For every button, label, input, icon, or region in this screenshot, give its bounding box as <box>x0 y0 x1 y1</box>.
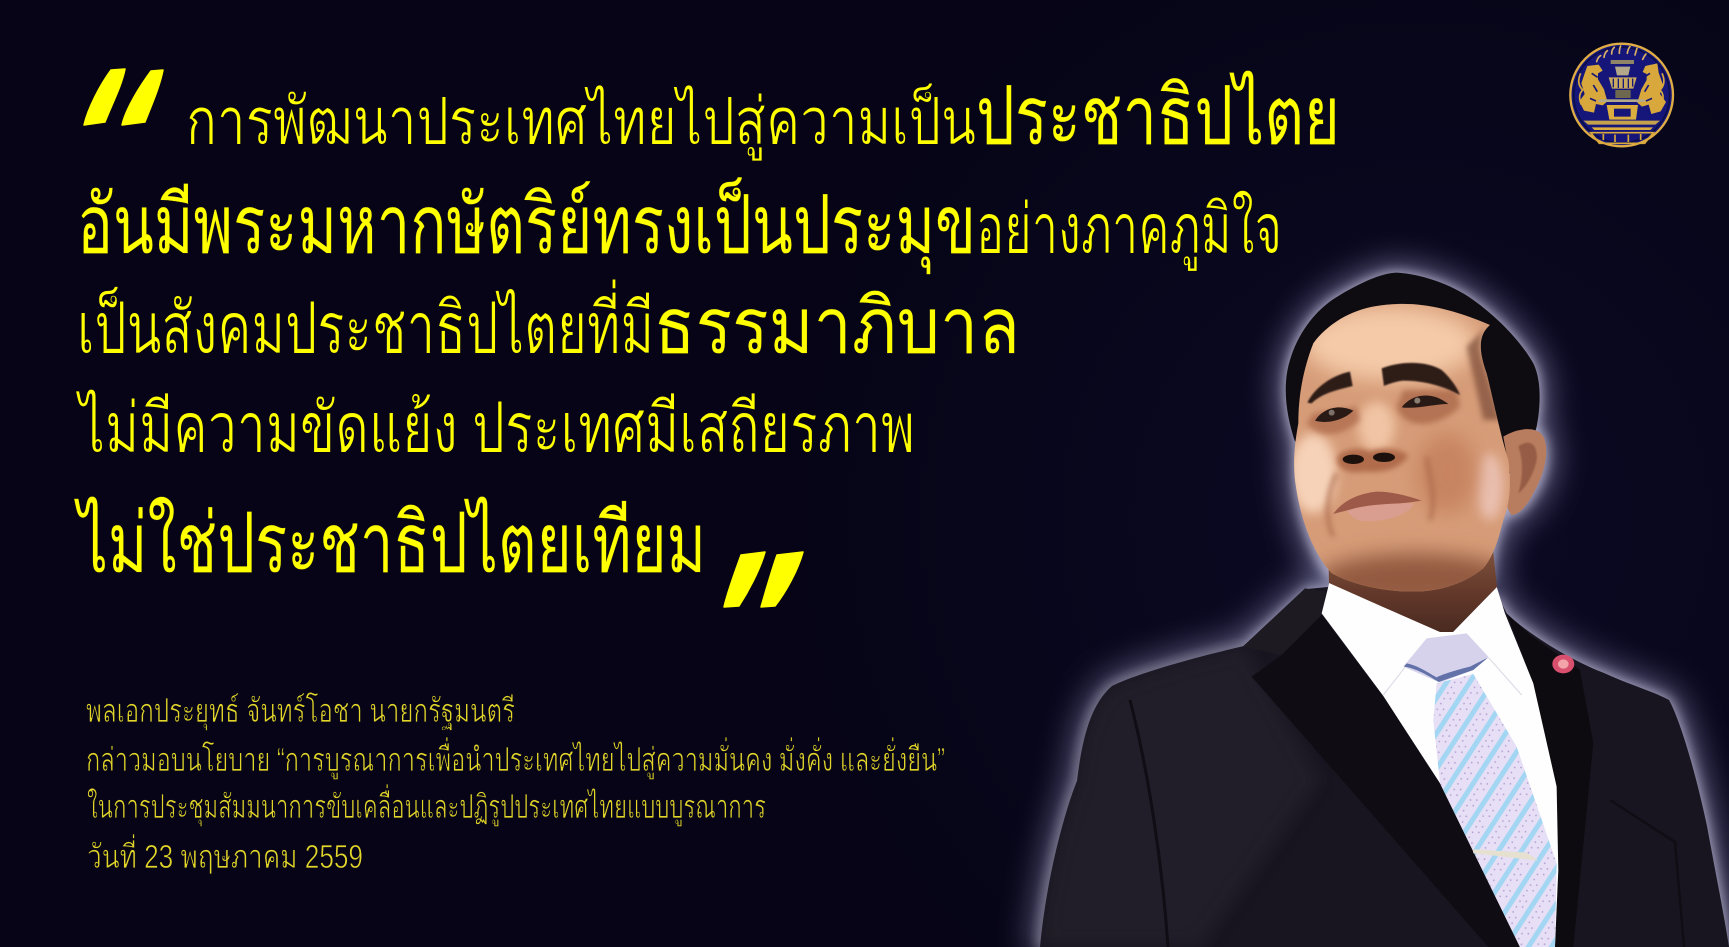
forehead light <box>1303 307 1477 380</box>
mouth <box>1333 492 1422 521</box>
eyes <box>1315 395 1448 422</box>
line 2: อันมีพระมหากษัตริย์ทรงเป็นประมุข <box>77 176 976 275</box>
shirt <box>1322 583 1558 947</box>
date: วันที่ 23 พฤษภาคม 2559 <box>87 834 363 875</box>
lions <box>1579 63 1666 114</box>
left lapel lower <box>1252 615 1520 947</box>
urn <box>1609 60 1637 98</box>
line 4: ไม่มีความขัดแย้ง ประเทศมีเสถียรภาพ <box>75 389 915 467</box>
brows <box>1307 363 1460 403</box>
nasolabial fold <box>1328 457 1433 537</box>
tie clip <box>1473 849 1538 861</box>
right lapel <box>1507 613 1593 947</box>
speech title: กล่าวมอบนโยบาย “การบูรณาการเพื่อนำประเทศไทยไปสู่ความมั่นคง มั่งคั่ง และยั่งยืน” <box>86 737 945 780</box>
knot shadow <box>1404 657 1488 682</box>
head <box>1286 273 1546 632</box>
portrait of speaker <box>1040 273 1729 947</box>
lapel pin <box>1552 655 1574 673</box>
right cheek light <box>1477 453 1503 520</box>
flames <box>1597 46 1646 62</box>
collar tips <box>1383 657 1522 695</box>
line 5: ไม่ใช่ประชาธิปไตยเทียม <box>74 496 706 590</box>
cheek mid tone <box>1417 433 1477 513</box>
main quote text <box>74 71 1340 590</box>
attribution text <box>86 692 945 875</box>
emblem: government seal <box>1570 44 1673 146</box>
line 3: เป็นสังคมประชาธิปไตยที่มี <box>77 279 654 369</box>
neck <box>1328 537 1497 632</box>
left lapel upper <box>1243 588 1325 655</box>
speaker: พลเอกประยุทธ์ จันทร์โอชา นายกรัฐมนตรี <box>86 692 515 731</box>
line 2: อย่างภาคภูมิใจ <box>976 189 1282 272</box>
suit jacket <box>1040 587 1729 947</box>
line 3: ธรรมาภิบาล <box>654 282 1020 370</box>
face <box>1294 304 1510 592</box>
tie blade <box>1433 674 1557 947</box>
tie knot <box>1403 633 1488 683</box>
left cheek light <box>1290 433 1337 513</box>
jaw shadow <box>1322 542 1493 592</box>
opening quotation mark <box>84 69 163 125</box>
event: ในการประชุมสัมมนาการขับเคลื่อนและปฏิรูปประเทศไทยแบบบูรณาการ <box>87 784 766 827</box>
nose bridge light <box>1358 402 1395 452</box>
line 1: ประชาธิปไตย <box>976 71 1340 162</box>
under eye right <box>1397 390 1460 424</box>
under eye left <box>1307 407 1360 434</box>
plinth <box>1583 99 1660 143</box>
collar, shirt, tie <box>1243 583 1593 947</box>
nose <box>1337 449 1408 472</box>
inner ear <box>1518 443 1537 493</box>
line 1: การพัฒนาประเทศไทยไปสู่ความเป็น <box>186 82 976 162</box>
jacket shading <box>1040 646 1684 947</box>
hair and head base <box>1286 273 1540 473</box>
ear <box>1503 429 1546 515</box>
temple shadow <box>1467 323 1500 420</box>
glow around silhouette <box>1040 273 1729 947</box>
closing quotation mark <box>724 552 803 607</box>
